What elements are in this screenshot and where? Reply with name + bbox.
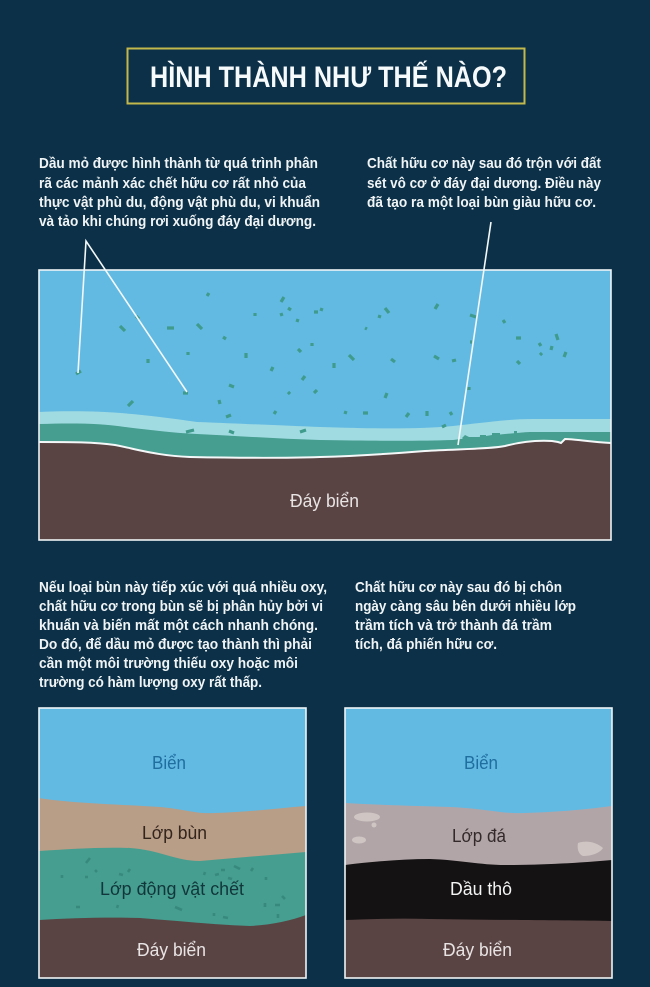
text block: burial under sediment: ngày càng sâu bên dưới nhiều lớp xyxy=(355,598,576,615)
panel: mud and dead organism layers xyxy=(39,708,306,978)
panel border xyxy=(345,708,612,978)
text block: oxygen conditions: chất hữu cơ trong bùn sẽ bị phân hủy bởi vi xyxy=(39,598,323,615)
title: HÌNH THÀNH NHƯ THẾ NÀO? xyxy=(150,60,507,94)
text block: formation from organic remains: rã các mảnh xác chết hữu cơ rất nhỏ của xyxy=(39,175,307,192)
crude oil layer xyxy=(345,859,612,925)
label: mud layer: Lớp bùn xyxy=(142,823,207,843)
text block: oxygen conditions: cần một môi trường thiếu oxy hoặc môi xyxy=(39,655,298,672)
text block: burial under sediment: tích, đá phiến hữu cơ. xyxy=(355,636,497,653)
text block: organic-rich mud: sét vô cơ ở đáy đại dương. Điều này xyxy=(367,175,602,192)
seabed xyxy=(345,919,612,978)
callout line: organic mud xyxy=(458,222,491,445)
stones xyxy=(352,812,603,856)
text block: formation from organic remains: Dầu mỏ được hình thành từ quá trình phân xyxy=(39,155,318,172)
text block: burial under sediment: trầm tích và trở thành đá trầm xyxy=(355,617,552,634)
text block: burial under sediment xyxy=(355,579,576,653)
title xyxy=(128,48,524,104)
text block: formation from organic remains: thực vật phù du, động vật phù du, vi khuẩn xyxy=(39,194,320,211)
mud layer xyxy=(39,798,306,875)
label: seabed: Đáy biển xyxy=(443,940,512,960)
organism particles xyxy=(62,858,285,918)
label: crude oil: Dầu thô xyxy=(450,879,512,899)
light sediment band xyxy=(39,411,611,445)
seabed outline xyxy=(39,439,611,458)
text block: organic-rich mud: đã tạo ra một loại bùn giàu hữu cơ. xyxy=(367,194,596,211)
teal organic layer xyxy=(39,423,611,462)
panel: rock and crude oil layers xyxy=(345,708,612,978)
label: seabed: Đáy biển xyxy=(137,940,206,960)
text block: oxygen conditions: Nếu loại bùn này tiếp xúc với quá nhiều oxy, xyxy=(39,579,327,596)
text block: formation from organic remains xyxy=(39,155,320,230)
panel border xyxy=(39,708,306,978)
panel border xyxy=(39,270,611,540)
label: sea: Biển xyxy=(152,753,186,773)
text block: organic-rich mud: Chất hữu cơ này sau đó trộn với đất xyxy=(367,155,601,172)
seabed label: Đáy biển xyxy=(290,491,359,511)
rock layer xyxy=(345,803,612,870)
teal sediment bumps xyxy=(462,431,517,443)
text block: oxygen conditions xyxy=(39,579,327,691)
text block: burial under sediment: Chất hữu cơ này sau đó bị chôn xyxy=(355,579,562,596)
seabed xyxy=(39,915,306,978)
label: dead organism layer: Lớp động vật chết xyxy=(100,879,244,899)
label: sea: Biển xyxy=(464,753,498,773)
text block: oxygen conditions: trường có hàm lượng oxy rất thấp. xyxy=(39,674,262,691)
label: rock layer: Lớp đá xyxy=(452,826,507,846)
dead organism layer xyxy=(39,848,306,930)
text block: organic-rich mud xyxy=(367,155,602,211)
text block: formation from organic remains: và tảo khi chúng rơi xuống đáy đại dương. xyxy=(39,213,316,230)
panel: seabed cross-section xyxy=(39,270,611,540)
text block: oxygen conditions: Do đó, để dầu mỏ được tạo thành thì phải xyxy=(39,636,312,653)
floating organic particles xyxy=(76,293,566,433)
seabed xyxy=(39,439,611,540)
callout lines: plankton particles xyxy=(78,241,187,392)
text block: oxygen conditions: khuẩn và biến mất một cách nhanh chóng. xyxy=(39,617,318,634)
